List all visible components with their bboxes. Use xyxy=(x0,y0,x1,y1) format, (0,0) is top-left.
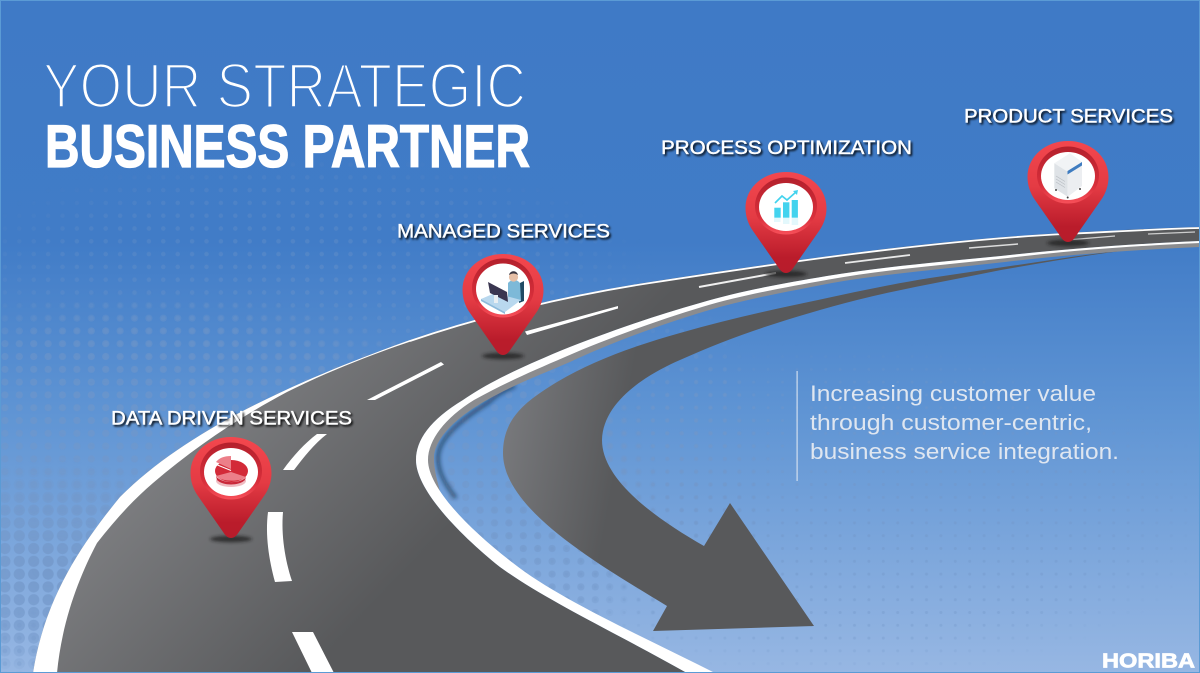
road xyxy=(33,227,1200,673)
road edge: top white line xyxy=(410,228,1200,341)
icon: rising bar chart xyxy=(774,190,798,225)
pin: process optimization xyxy=(746,172,826,277)
label: data driven services: DATA DRIVEN SERVICES xyxy=(111,408,352,430)
road centre dashes xyxy=(267,306,618,673)
label: managed services: MANAGED SERVICES xyxy=(397,220,610,242)
label: process optimization: PROCESS OPTIMIZATION xyxy=(661,137,912,159)
label: product services: PRODUCT SERVICES xyxy=(964,106,1173,128)
title line 2: BUSINESS PARTNER xyxy=(45,113,530,180)
callout text: business service integration. xyxy=(810,439,1119,464)
road shadow xyxy=(438,386,515,498)
pin: managed services xyxy=(462,254,544,359)
callout text: Increasing customer value xyxy=(810,381,1096,406)
road edge: right white band xyxy=(416,241,1200,673)
icon: pie chart xyxy=(215,456,248,487)
pin: product services xyxy=(1028,141,1108,246)
title xyxy=(43,52,530,180)
road edge: grey kerb xyxy=(416,241,1200,495)
road surface xyxy=(33,227,1200,673)
logo: HORIBA: HORIBA xyxy=(1102,650,1195,672)
pin: data driven services xyxy=(190,437,272,542)
callout text: through customer-centric, xyxy=(810,410,1092,435)
callout text xyxy=(810,381,1119,464)
halftone dot pattern xyxy=(1,176,1072,666)
icon: instrument cabinet xyxy=(1054,153,1082,198)
title line 1: YOUR STRATEGIC xyxy=(43,52,526,122)
callout divider xyxy=(796,371,798,481)
road edge: left white band xyxy=(33,340,412,673)
title line 1: YOUR STRATEGIC xyxy=(43,52,526,122)
arrow: road branch xyxy=(503,243,1197,631)
icon: operator at desk xyxy=(481,271,524,314)
